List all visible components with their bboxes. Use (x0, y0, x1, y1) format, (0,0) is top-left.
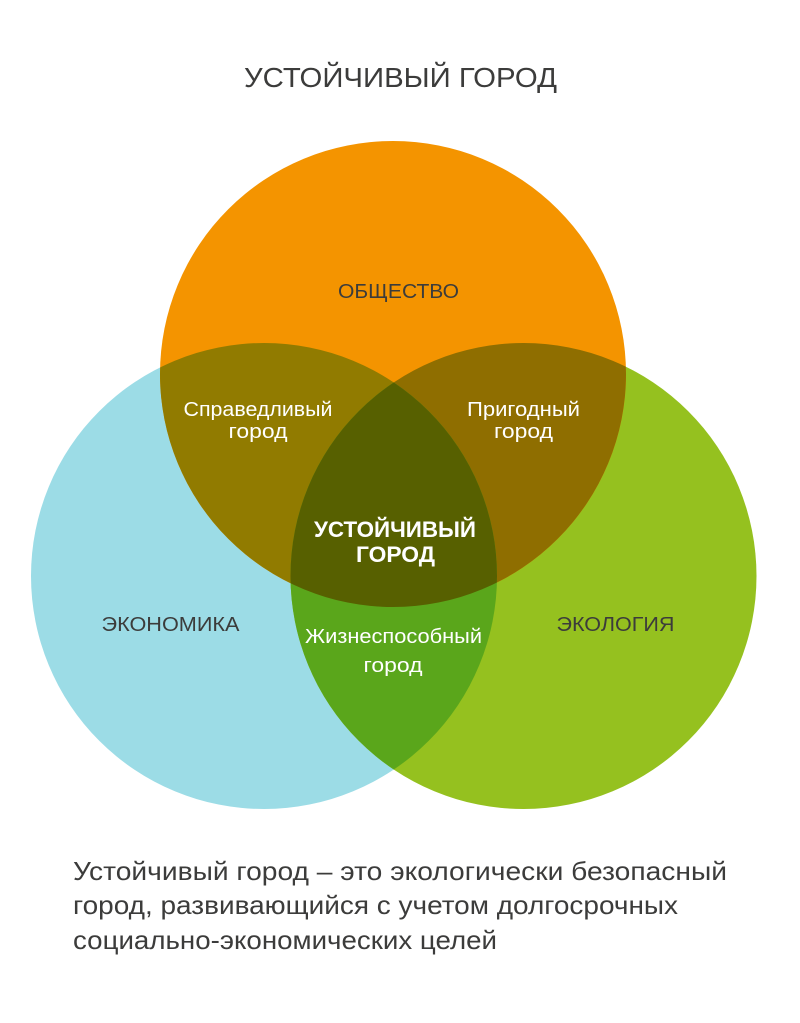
description: социально-экономических целей (73, 925, 497, 955)
label: just city (184, 399, 332, 443)
overlap: society and ecology (394, 343, 626, 582)
label: just city: Справедливый (184, 399, 332, 421)
overlap: economy and ecology (290, 382, 497, 770)
label: sustainable city: ГОРОД (356, 542, 435, 567)
label: ecology: ЭКОЛОГИЯ (556, 614, 674, 636)
label: viable city: Жизнеспособный (305, 626, 482, 648)
label: society: ОБЩЕСТВО (338, 281, 459, 303)
label: viable city: город (364, 655, 423, 677)
label: sustainable city: УСТОЙЧИВЫЙ (314, 517, 476, 542)
circle: economy (31, 343, 497, 809)
description: город, развивающийся с учетом долгосрочных (73, 890, 678, 920)
label: sustainable city (314, 517, 476, 567)
title: УСТОЙЧИВЫЙ ГОРОД (244, 62, 557, 93)
label: just city: город (228, 421, 288, 443)
overlap: society and economy (160, 343, 394, 584)
circle: ecology (290, 343, 756, 809)
label: livable city (467, 399, 580, 443)
label: economy: ЭКОНОМИКА (102, 614, 240, 636)
description: Устойчивый город – это экологически безопасный (73, 856, 727, 886)
venn diagram (31, 141, 756, 809)
circle: society (160, 141, 626, 607)
label: livable city: Пригодный (467, 399, 580, 421)
overlap: center (290, 382, 497, 607)
label: livable city: город (494, 421, 553, 443)
label: viable city (305, 626, 482, 677)
description (73, 856, 727, 955)
